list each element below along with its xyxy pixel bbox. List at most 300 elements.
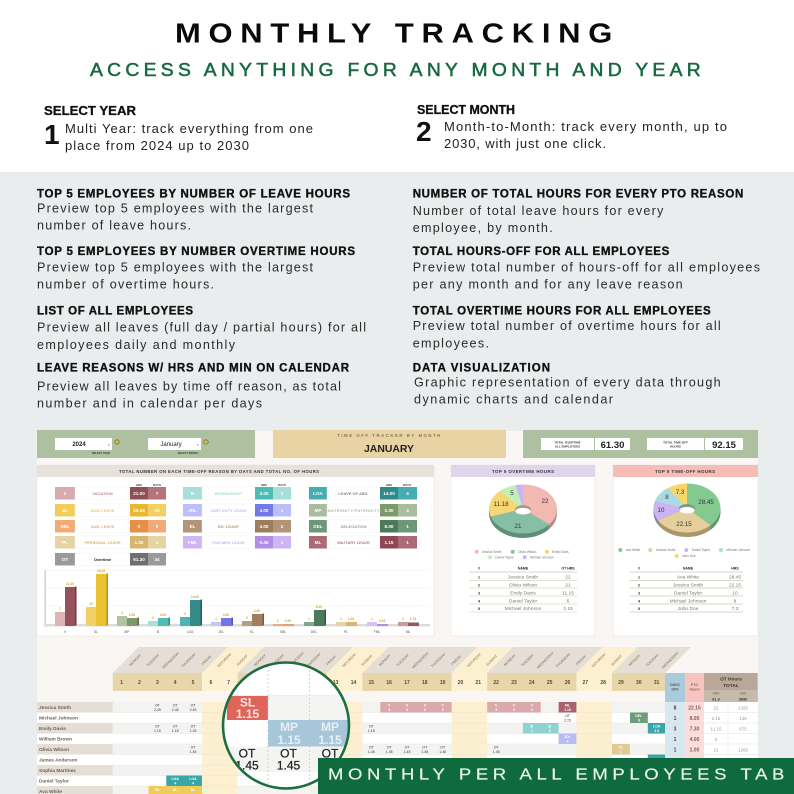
feature: data visualization: Graphic representation of every data through [414, 376, 721, 390]
magnifier callout [222, 662, 350, 790]
calendar: day numbers: 13 [333, 680, 339, 686]
feature: top 5 overtime hours: TOP 5 EMPLOYEES BY NUMBER OVERTIME HOURS [37, 246, 355, 258]
table: overtime: # [478, 566, 480, 570]
leave entries: DEL [635, 714, 643, 718]
leave entries: 1 [620, 750, 622, 754]
leave entries: V [531, 704, 534, 708]
employee names: Jessica Smith [39, 705, 71, 711]
feature: top 5 overtime hours: number of overtime hours. [37, 278, 214, 292]
calendar: day numbers: 3 [156, 680, 159, 686]
panel: totals: 61.30 [601, 440, 624, 451]
reason: bereavement: 2 [281, 491, 284, 496]
reason: family medical leave: FAM MED LEAVE [212, 540, 245, 545]
calendar: weekday header: SUNDAY [610, 653, 624, 667]
calendar: weekday header: FRIDAY [326, 654, 338, 666]
column labels: HRS [261, 483, 267, 487]
panel: totals: ALL EMPLOYEES [555, 444, 580, 448]
bar chart [44, 569, 430, 634]
leave entries: 3 [406, 708, 408, 712]
calendar: totals columns: OFF [672, 688, 679, 692]
employee names [37, 702, 113, 794]
calendar: totals columns: PTO [691, 683, 698, 687]
calendar: weekday header: THURSDAY [555, 652, 572, 668]
table: overtime: 5 [478, 607, 480, 611]
calendar: weekday header: TUESDAY [645, 653, 660, 667]
reason: vacation: V [63, 491, 67, 496]
panel heading [451, 465, 595, 477]
feature: total hours per PTO reason [413, 189, 743, 235]
bar chart: 1 [340, 617, 342, 621]
reason: vacation: 21.00 [133, 491, 145, 496]
employee names: Sophia Martinez [39, 768, 76, 774]
overtime entries: OT [405, 746, 410, 750]
reason: sabbatical leave: SBL [60, 524, 70, 529]
table: time-off: Michael Johnson [670, 598, 707, 604]
feature: top 5 leave hours: number of leave hours. [37, 219, 191, 233]
calendar: totals columns: 11.15 [711, 726, 722, 732]
step 2: select month: SELECT MONTH [417, 103, 515, 117]
calendar: totals columns: 22 [713, 706, 719, 710]
panel: month title: JANUARY [364, 444, 414, 455]
feature: data visualization: DATA VISUALIZATION [413, 363, 550, 375]
overtime entries: OT [369, 724, 375, 728]
calendar: weekday header: THURSDAY [181, 652, 197, 668]
calendar: totals columns: 61.3 [712, 698, 720, 702]
bar chart: PL [344, 630, 348, 634]
calendar: totals columns: HRS [713, 692, 719, 696]
employee names: Olivia Wilson [39, 747, 69, 753]
calendar: weekday header: MONDAY [129, 653, 143, 667]
calendar: totals columns: 7.30 [690, 726, 700, 732]
reason: leave of absence: 4 [406, 491, 409, 496]
leave entries: V [495, 704, 498, 708]
employee names: Emily Davis [39, 726, 66, 732]
table: overtime: 2.15 [563, 606, 573, 612]
calendar: weekday header: TUESDAY [396, 653, 410, 667]
bar chart: 14.00 [191, 595, 199, 599]
reason: military leave: ML [315, 540, 322, 545]
panel heading [37, 465, 434, 477]
calendar: day numbers: 14 [351, 680, 356, 686]
calendar: totals columns: DAYS [670, 683, 680, 687]
bar chart: 4.00 [223, 613, 229, 617]
leave entries: LOA [172, 777, 179, 781]
legend: overtime: Jessica Smith [482, 550, 502, 554]
pie chart: overtime: 22 [542, 498, 549, 505]
calendar: day numbers: 23 [511, 680, 517, 686]
reason: overtime: 61.30 [133, 557, 145, 562]
overtime entries: 1.45 [404, 750, 410, 754]
pie chart: overtime: 11.18 [493, 501, 509, 508]
leave entries: V [424, 704, 427, 708]
table: overtime: 4 [478, 599, 480, 603]
step 1: select year: Multi Year: track everything from one [65, 121, 313, 136]
step 1: select year: place from 2024 up to 2030 [65, 138, 249, 153]
reason: military leave: 1.15 [385, 540, 394, 545]
calendar: day numbers: 12 [315, 680, 321, 686]
bar chart: LOA [187, 630, 194, 634]
reason: sabbatical leave: SAB. LEAVE [91, 524, 115, 529]
panel: year and month selectors: ▾ [108, 443, 110, 447]
bar chart: MP [125, 630, 130, 634]
reason: family medical leave: FML [188, 540, 197, 545]
reason: vacation: 7 [156, 491, 159, 496]
reason: overtime: 34 [154, 557, 160, 562]
overtime entries: OT [191, 704, 196, 708]
table: overtime: Daniel Taylor [509, 598, 537, 604]
overtime entries: 1.45 [493, 750, 500, 754]
panel: year and month selectors: 2024 [72, 442, 86, 448]
reason: family medical leave [183, 536, 291, 548]
overtime entries: 1.45 [421, 750, 428, 754]
leave entries: 4 [567, 740, 569, 744]
subtitle: ACCESS ANYTHING FOR ANY MONTH AND YEAR [90, 60, 705, 80]
pie chart: time-off: 8 [665, 494, 669, 501]
overtime entries: 1.15 [368, 729, 375, 733]
bar chart: 0.45 [379, 619, 385, 623]
bar chart: 1 [371, 617, 373, 621]
calendar: totals columns: 0 [715, 737, 718, 742]
calendar: totals columns: Hours [689, 688, 700, 692]
table: overtime: 21 [565, 583, 571, 589]
table: overtime: 5 [567, 598, 570, 604]
column labels [136, 483, 411, 487]
reason: vacation [55, 487, 166, 500]
leave entries: 4 [174, 782, 176, 786]
reason: maternity: 3.30 [385, 508, 394, 513]
bar chart: 3.30 [129, 613, 135, 617]
feature: list of employees: Preview all leaves (full day / partial hours) for all [37, 321, 366, 335]
magnifier callout: 1.45 [277, 758, 301, 772]
table: time-off: # [638, 566, 640, 570]
employee names: James Anderson [39, 758, 78, 764]
reason: sick leave: 29.45 [133, 508, 145, 513]
panel: year and month selectors: January [160, 442, 182, 448]
leave entries: SL [173, 788, 178, 792]
calendar: totals columns: 1320 [738, 706, 749, 710]
calendar: day numbers: 6 [210, 680, 213, 686]
calendar: totals columns: 1.00 [690, 748, 700, 754]
feature: total hours-off: Preview total number of hours-off for all employees [413, 261, 760, 275]
calendar: day numbers: 20 [458, 680, 463, 686]
calendar: weekday header: SUNDAY [361, 653, 374, 667]
feature: total hours per PTO reason: Number of total leave hours for every [413, 204, 664, 218]
magnifier callout: MP [280, 720, 298, 734]
calendar: day numbers: 4 [174, 680, 177, 686]
column labels: DAYS [153, 483, 161, 487]
reason: education leave: ED. LEAVE [218, 524, 239, 529]
feature: leave reasons: LEAVE REASONS W/ HRS AND MIN ON CALENDAR [37, 363, 350, 375]
magnifier callout: OT [322, 746, 339, 760]
panel: totals: HOURS [670, 444, 681, 448]
feature: total hours-off: per any month and for any leave reason [413, 278, 683, 292]
reason: jury duty leave [183, 504, 291, 516]
reason: education leave: EL [190, 524, 196, 529]
table: time-off: NAME [683, 566, 694, 570]
reason: personal leave [55, 536, 166, 548]
overtime entries: OT [387, 746, 392, 750]
reason: overtime: Overtime [94, 557, 112, 562]
overtime entries [154, 704, 571, 754]
leave entries: PL [619, 746, 624, 750]
overtime entries: OT [173, 704, 178, 708]
leave entries: JDL [564, 735, 572, 739]
leave entries: 8 [638, 718, 640, 722]
legend: time-off: Michael Johnson [726, 548, 750, 552]
step 1: select year: SELECT YEAR [44, 104, 136, 118]
bar chart: 1.15 [410, 617, 416, 621]
overtime entries: 2.45 [190, 708, 196, 712]
reason: personal leave: PERSONAL LEAVE [84, 540, 121, 545]
magnifier callout: SL [240, 696, 255, 710]
overtime entries: 2.45 [172, 708, 179, 712]
table: overtime: OT HRS [561, 566, 575, 570]
reason: military leave: 1 [406, 540, 409, 545]
leave entries: 2 [549, 729, 551, 733]
table: overtime: 22 [565, 575, 571, 581]
calendar: totals columns: 4.00 [690, 737, 700, 743]
bar chart: 1 [402, 617, 404, 621]
calendar: totals columns: 8 [674, 706, 677, 712]
leave entries: LOA [653, 724, 661, 728]
reason: maternity: MATERNITY/PATERNITY [328, 508, 380, 513]
bar chart: 2 [246, 616, 248, 620]
employee names: Daniel Taylor [39, 778, 69, 784]
overtime entries: OT [155, 704, 161, 708]
feature: total overtime: employees. [413, 336, 489, 350]
feature: total hours per PTO reason: employee, by month. [413, 221, 553, 235]
reason: jury duty leave: JDL [188, 508, 197, 513]
calendar: totals columns: 1 [674, 748, 677, 754]
reason: education leave: 2 [281, 524, 284, 529]
reason: sabbatical leave: 0 [138, 524, 141, 529]
panel: year and month selectors [37, 430, 255, 458]
calendar: employee rows [37, 702, 666, 794]
calendar: weekday header: THURSDAY [430, 652, 447, 668]
step 1: select year: 1 [44, 119, 60, 150]
leave entries: B [548, 724, 551, 728]
overtime entries: 1.45 [439, 750, 446, 754]
legend: overtime: Emily Davis [552, 550, 569, 554]
feature: top 5 overtime hours [37, 246, 355, 292]
table: time-off: Jessica Smith [673, 583, 703, 589]
feature: total hours-off [413, 246, 760, 292]
table: time-off: 2 [638, 584, 640, 588]
calendar: day numbers: 26 [565, 680, 570, 686]
leave entries: V [513, 704, 516, 708]
bar chart: EL [250, 630, 254, 634]
panel: totals: 92.15 [712, 440, 737, 451]
overtime entries: 1.45 [386, 750, 393, 754]
panel: year and month selectors: SELECT MONTH [178, 451, 198, 455]
feature: leave reasons: number and in calendar per days [37, 397, 262, 411]
overtime entries: OT [422, 746, 428, 750]
calendar: weekday header: MONDAY [378, 653, 392, 667]
reason: education leave [183, 520, 291, 532]
calendar: weekday header: SUNDAY [236, 653, 249, 667]
panel heading: TOP 5 TIME-OFF HOURS [655, 469, 715, 474]
feature: total overtime: Preview total number of overtime hours for all [413, 319, 721, 333]
magnifier callout: 1.15 [277, 733, 301, 747]
overtime entries: OT [191, 746, 196, 750]
reason: bereavement [183, 487, 291, 500]
reason: delegation: 1 [406, 524, 409, 529]
step 1: select year [44, 104, 313, 153]
panel heading [613, 465, 758, 477]
calendar: day numbers: 27 [583, 680, 588, 686]
panel: time-off reasons [37, 465, 434, 636]
bar chart: 2 [152, 616, 154, 620]
calendar: day numbers: 7 [227, 680, 230, 686]
bar chart: 1 [308, 617, 310, 621]
leave entries: ML [565, 704, 571, 708]
calendar: day numbers: 11 [297, 680, 303, 686]
calendar: day numbers: 22 [493, 680, 499, 686]
legend: overtime: Olivia Wilson [518, 550, 537, 554]
feature: leave reasons: Preview all leaves by time off reason, as total [37, 380, 341, 394]
legend: overtime: Daniel Taylor [495, 555, 515, 559]
calendar: day numbers: 21 [476, 680, 481, 686]
leave entries: 3.3 [654, 729, 659, 733]
pie chart: overtime [489, 484, 557, 538]
panel: totals [523, 430, 758, 458]
table: time-off: 3 [638, 591, 640, 595]
feature: list of employees: LIST OF ALL EMPLOYEES [37, 305, 193, 317]
calendar: weekday header: SATURDAY [217, 652, 233, 668]
table: overtime: Michael Johnson [505, 606, 542, 612]
reason: family medical leave: 1 [281, 540, 284, 545]
reason: family medical leave: 0.45 [260, 540, 269, 545]
table: overtime [469, 566, 577, 612]
overtime entries: OT [369, 746, 375, 750]
calendar: day numbers: 30 [636, 680, 642, 686]
calendar: totals columns: 8.00 [690, 716, 700, 722]
reason: bereavement: 4.00 [260, 491, 269, 496]
step 2: select month: 2 [416, 116, 432, 147]
table: overtime: 3 [478, 591, 480, 595]
table: time-off: 28.45 [729, 575, 741, 581]
calendar: totals columns: TOTAL [723, 683, 739, 689]
employee names: Michael Johnson [39, 716, 78, 722]
table: time-off: 1 [638, 576, 640, 580]
leave entries [148, 702, 666, 794]
pie chart: time-off: 28.45 [698, 499, 714, 506]
reason: jury duty leave: JURY DUTY LEAVE [210, 508, 247, 513]
pie chart: time-off: 22.15 [676, 521, 692, 528]
calendar: weekday header: TUESDAY [146, 653, 161, 667]
leave entries: V [406, 704, 409, 708]
feature: top 5 leave hours: TOP 5 EMPLOYEES BY NUMBER OF LEAVE HOURS [37, 189, 350, 201]
calendar: day numbers: 16 [386, 680, 392, 686]
overtime entries: OT [155, 724, 161, 728]
bar chart: 10 [89, 602, 93, 606]
calendar: weekday header: SATURDAY [466, 652, 483, 668]
reason: jury duty leave: 1 [281, 508, 284, 513]
calendar: weekday header: TUESDAY [520, 653, 535, 667]
table: time-off: Ava White [677, 575, 699, 581]
calendar: weekday header: WEDNESDAY [411, 651, 430, 670]
calendar: weekday header [113, 647, 691, 673]
table: overtime: Emily Davis [510, 590, 536, 596]
legend: time-off: Jessica Smith [656, 548, 676, 552]
magnifier callout: MP [321, 720, 339, 734]
calendar: day numbers: 17 [404, 680, 410, 686]
reason: military leave: MILITARY LEAVE [337, 540, 370, 545]
magnifier callout: 1.15 [318, 733, 342, 747]
calendar: weekday header: THURSDAY [305, 652, 322, 668]
table: overtime: Jessica Smith [508, 575, 538, 581]
calendar: totals columns: MIN [740, 692, 747, 696]
table: time-off: HRS [731, 566, 739, 570]
calendar: totals columns: 21 [713, 748, 719, 752]
reason: maternity [309, 504, 417, 516]
leave entries: LOA [189, 777, 197, 781]
leave entries: SL [155, 788, 160, 792]
legend: time-off: John Doe [682, 554, 696, 558]
calendar: totals columns [665, 673, 758, 762]
table: time-off: John Doe [678, 606, 699, 612]
reason: leave of absence [309, 487, 417, 500]
panel: totals: TOTAL TIME-OFF [663, 440, 688, 444]
calendar: totals columns: 2.15 [712, 716, 721, 721]
table: time-off: 7.3 [732, 606, 739, 612]
overtime entries: 1.15 [190, 729, 196, 733]
leave entries: 4 [192, 782, 194, 786]
table: overtime: 1 [478, 576, 480, 580]
bar chart: B [157, 630, 160, 634]
reason: delegation [309, 520, 417, 532]
reason: overtime: OT [62, 557, 68, 562]
calendar: day numbers [113, 673, 665, 691]
panel: month title [273, 430, 506, 458]
calendar: day numbers: 15 [369, 680, 374, 686]
table: overtime: NAME [518, 566, 529, 570]
reason: bereavement: B [191, 491, 195, 496]
calendar: totals columns: 22.15 [688, 706, 701, 712]
reason: sick leave [55, 504, 166, 516]
leave entries: SL [191, 788, 196, 792]
reason: sabbatical leave: 0 [156, 524, 159, 529]
table: time-off: 8 [734, 598, 737, 604]
panel: totals: TOTAL OVERTIME [554, 440, 581, 444]
leave entries: V [388, 704, 391, 708]
reason: delegation: DEL [313, 524, 323, 529]
feature: data visualization [413, 363, 721, 406]
bar chart: SBL [280, 630, 286, 634]
legend: overtime: Michael Johnson [530, 555, 554, 559]
pie chart: overtime: 21 [515, 523, 522, 530]
leave entries: 3 [388, 708, 390, 712]
table: time-off: 5 [638, 607, 640, 611]
bar chart: 1 [215, 617, 217, 621]
bar chart: 29.45 [97, 569, 105, 573]
banner: MONTHLY PER ALL EMPLOYEES TAB [328, 766, 789, 784]
calendar: weekday header: SATURDAY [591, 652, 607, 668]
overtime entries: 2.45 [154, 708, 161, 712]
calendar: weekday header: MONDAY [253, 653, 267, 667]
calendar: weekday header: WEDNESDAY [536, 651, 555, 670]
calendar: day numbers: 28 [600, 680, 606, 686]
feature: top 5 leave hours: Preview top 5 employees with the largest [37, 202, 314, 216]
bar chart: 4.00 [254, 609, 260, 613]
overtime entries: 1.15 [172, 729, 179, 733]
table: time-off: 10 [732, 590, 738, 596]
overtime entries: OT [440, 746, 446, 750]
calendar: day numbers: 8 [245, 680, 248, 686]
table: overtime: Olivia Wilson [509, 583, 537, 589]
bar chart: 3 [121, 611, 123, 615]
feature: list of employees: employees daily and monthly [37, 338, 236, 352]
